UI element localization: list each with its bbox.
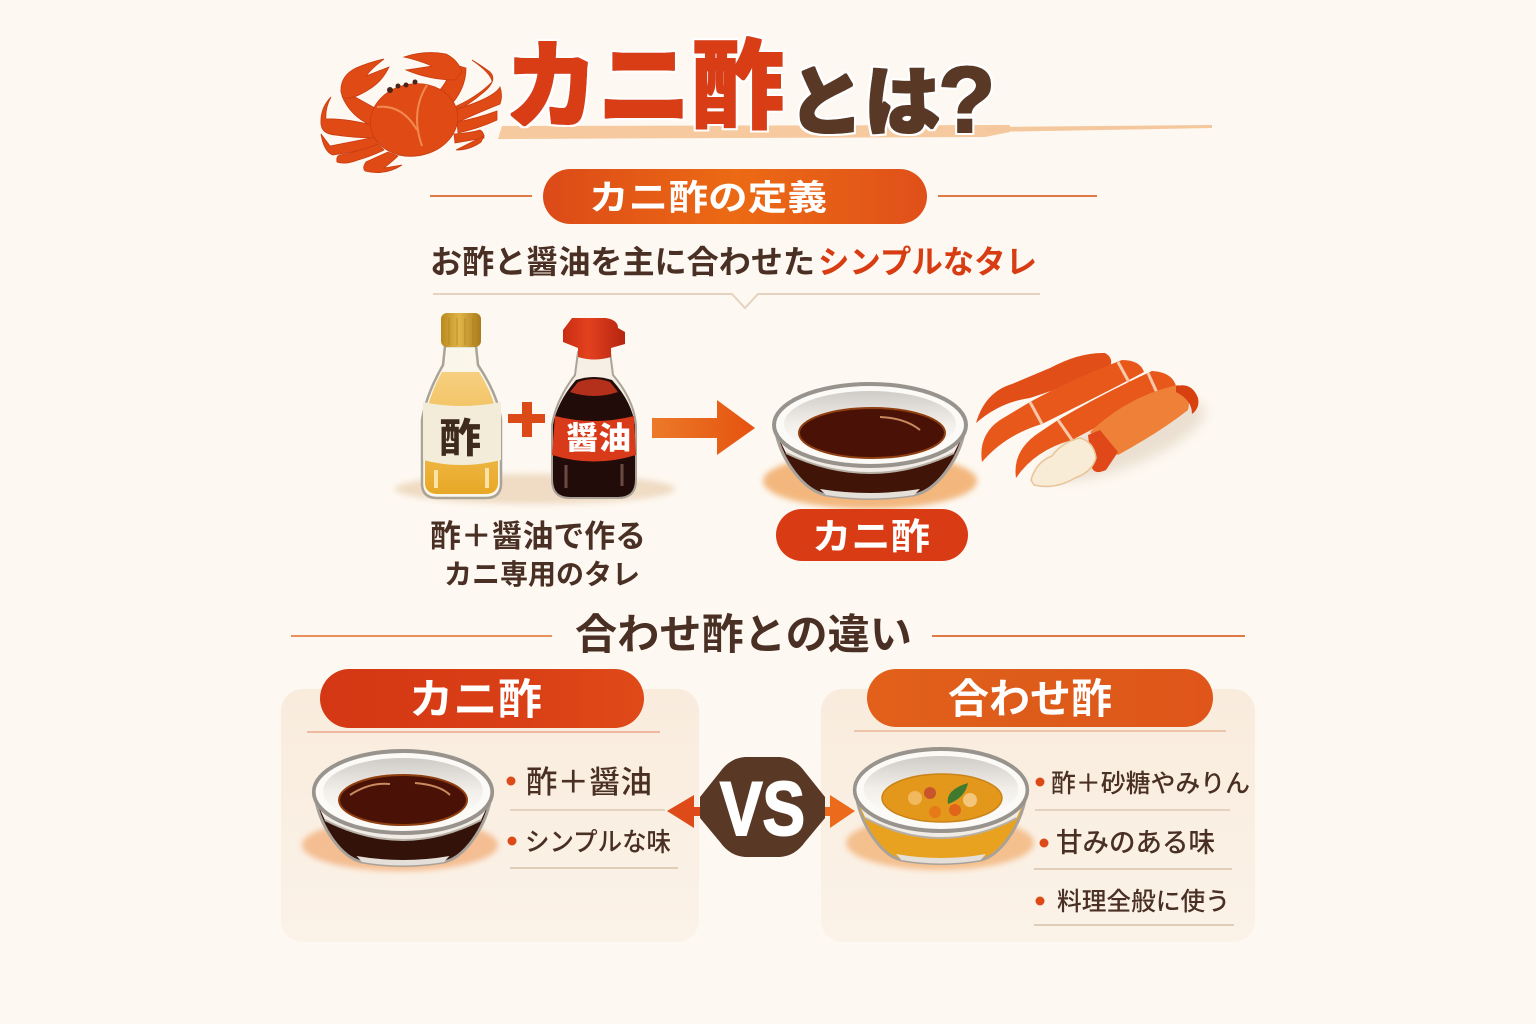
awase-zu bullet list: 酢＋砂糖やみりん [1051, 770, 1250, 798]
icon: crab [321, 53, 502, 173]
ingredient caption [430, 519, 646, 590]
icon: kani-zu bowl [763, 384, 977, 509]
awase-zu bullet list: 料理全般に使う [1057, 888, 1230, 916]
definition heading pill [430, 169, 1097, 224]
icon: soy sauce bottle [552, 318, 636, 498]
icon: vinegar bottle: 酢 [439, 417, 481, 461]
bottle shadow [395, 474, 675, 504]
kani-zu bullet list: 酢＋醤油 [526, 765, 652, 800]
icon: awase-zu bowl [846, 749, 1034, 870]
definition heading pill: カニ酢の定義 [589, 179, 827, 218]
kani-zu header pill [320, 669, 644, 728]
title: ? [938, 47, 995, 152]
title: カニ酢 [505, 34, 784, 141]
kani-zu label pill [776, 509, 968, 561]
kani-zu header pill: カニ酢 [409, 676, 542, 723]
arrow [652, 400, 755, 455]
ingredient caption: 酢＋醤油で作る [430, 519, 646, 554]
vs badge [667, 757, 855, 857]
definition sentence: お酢と醤油を主に合わせた [430, 244, 815, 280]
title: とは [788, 61, 940, 146]
definition sentence [430, 244, 1037, 280]
awase-zu header pill [867, 669, 1213, 727]
kani-zu label pill: カニ酢 [812, 516, 930, 557]
arrow left [667, 795, 720, 828]
icon: plus [508, 402, 545, 437]
kani-zu bullet list: シンプルな味 [525, 827, 671, 857]
title [505, 34, 995, 152]
title underline brush [498, 125, 1212, 139]
kani-zu bullet list [506, 765, 678, 868]
ingredient caption: カニ専用のタレ [444, 559, 640, 590]
comparison heading: 合わせ酢との違い [575, 611, 912, 658]
arrow right [805, 795, 855, 828]
awase-zu bullet list: 甘みのある味 [1056, 828, 1215, 858]
panel: kani-zu [281, 669, 699, 942]
callout line with notch [433, 294, 1040, 308]
awase-zu header pill: 合わせ酢 [948, 676, 1112, 722]
panel: awase-zu [821, 669, 1255, 942]
awase-zu bullet list [1034, 770, 1250, 925]
icon: vinegar bottle [422, 313, 501, 498]
icon: kani-zu bowl small [302, 751, 498, 871]
definition sentence: シンプルなタレ [818, 244, 1037, 280]
vs badge: VS [720, 767, 805, 852]
icon: crab legs [976, 353, 1214, 496]
icon: soy sauce bottle: 醤油 [566, 421, 631, 456]
